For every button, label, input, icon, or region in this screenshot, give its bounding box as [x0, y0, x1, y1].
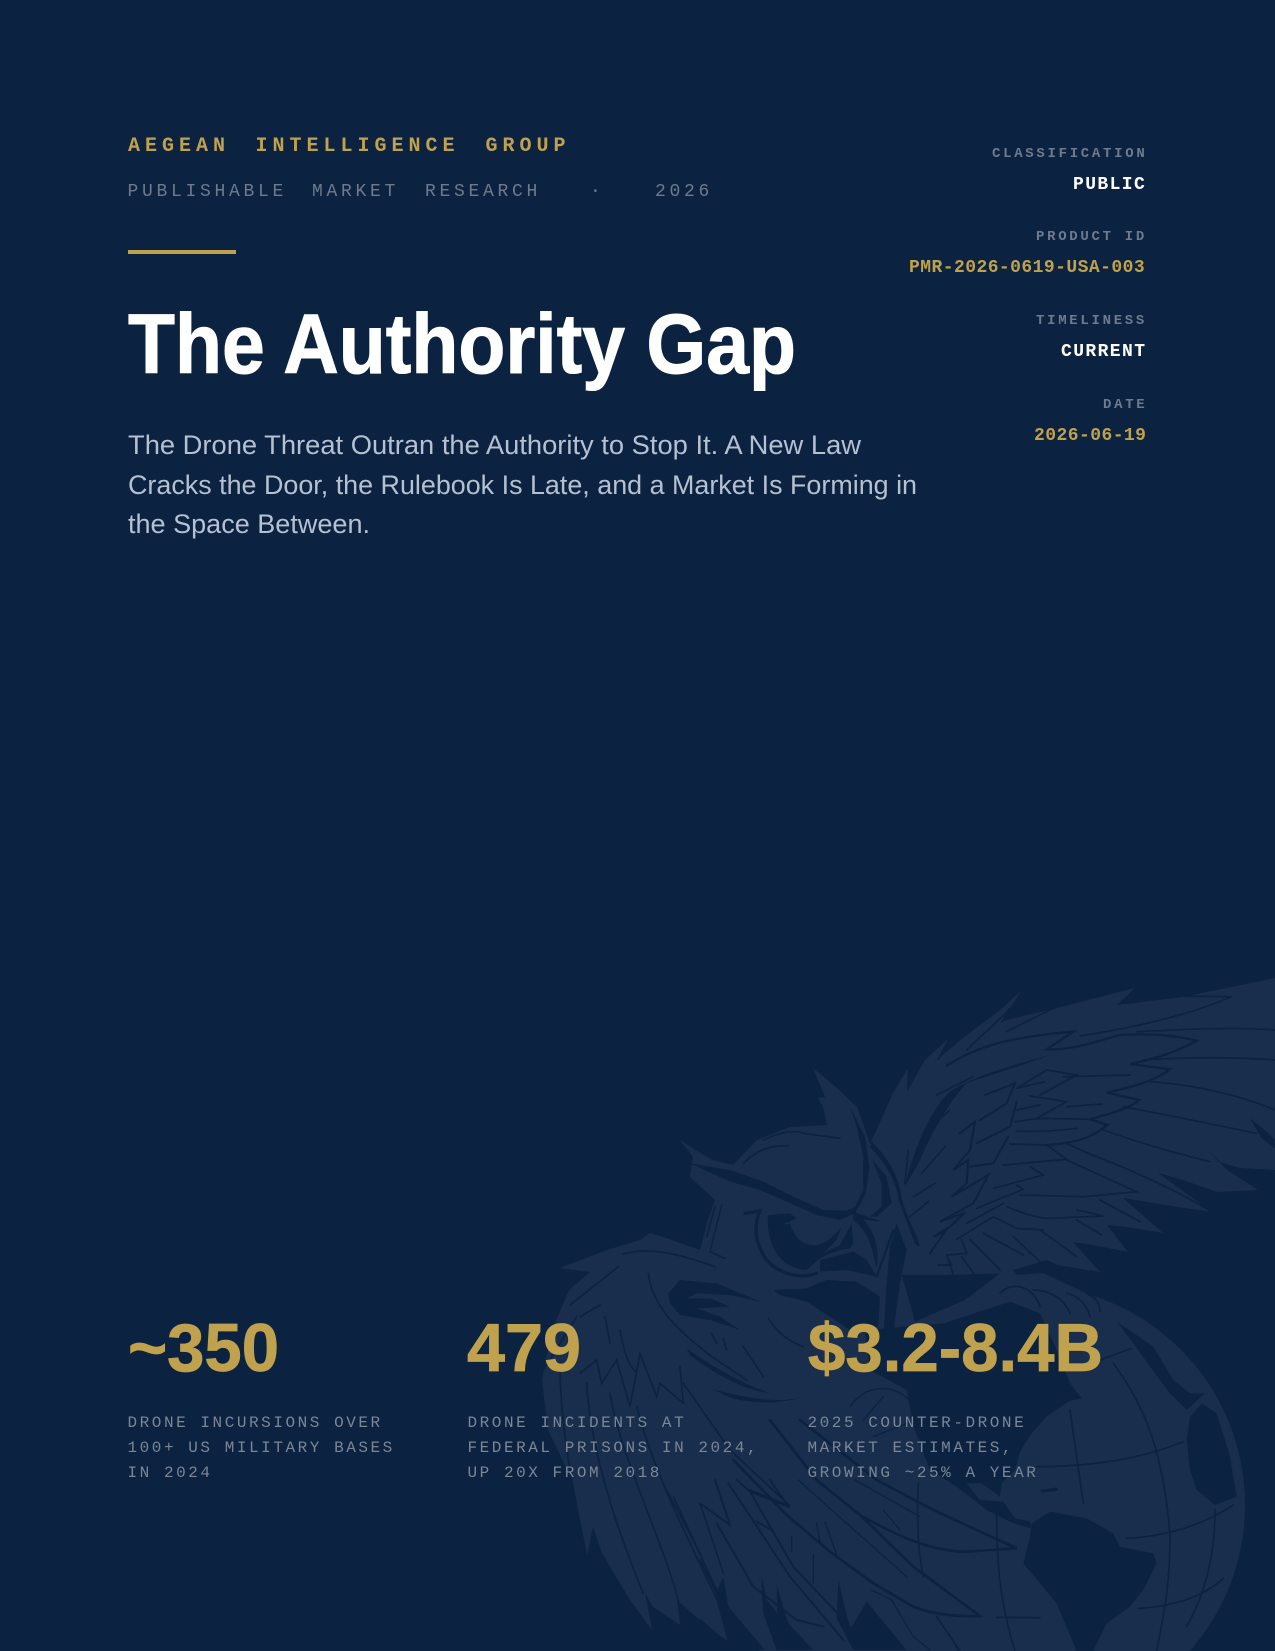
timeliness: CURRENT: [1061, 342, 1146, 362]
subtitle: the Space Between.: [128, 509, 370, 539]
stat: drone incursions: 100+ US MILITARY BASES: [128, 1439, 395, 1457]
stat: prison incidents: [467, 1310, 759, 1482]
subtitle: Cracks the Door, the Rulebook Is Late, and a Market Is Forming in: [128, 470, 917, 500]
header: brand eyebrow: AEGEAN: [128, 135, 230, 158]
header: product line: RESEARCH: [425, 182, 541, 202]
date: [1034, 397, 1147, 446]
globe land masses and grid lines: [865, 1273, 1237, 1651]
stat: market size: MARKET ESTIMATES,: [808, 1439, 1014, 1457]
header: brand eyebrow: INTELLIGENCE: [256, 135, 460, 158]
timeliness: TIMELINESS: [1036, 313, 1147, 329]
header: product line: MARKET: [312, 182, 399, 202]
timeliness: [1036, 313, 1147, 362]
header: product line: PUBLISHABLE: [128, 182, 287, 202]
header: brand eyebrow: GROUP: [486, 135, 571, 158]
subtitle: The Drone Threat Outran the Authority to Stop It. A New Law: [128, 430, 861, 460]
classification: CLASSIFICATION: [992, 146, 1147, 162]
stat: market size: [808, 1310, 1103, 1482]
stat: drone incursions: [128, 1310, 395, 1482]
globe disc: [805, 1285, 1245, 1651]
owl head, brow and left shoulder details: [540, 1107, 917, 1380]
date: 2026-06-19: [1034, 426, 1146, 446]
classification: PUBLIC: [1073, 175, 1146, 195]
metadata column: [909, 146, 1147, 446]
header: product line: 2026: [655, 182, 713, 202]
gold rule: [128, 250, 236, 254]
owl talons: [1000, 1286, 1100, 1317]
subtitle: [128, 430, 917, 539]
product id: [909, 229, 1147, 278]
product id: PRODUCT ID: [1036, 229, 1147, 245]
stat: drone incursions: IN 2024: [128, 1464, 213, 1482]
stat: prison incidents: UP 20X FROM 2018: [468, 1464, 662, 1482]
stat: market size: $3.2-8.4B: [808, 1310, 1103, 1386]
stat: drone incursions: DRONE INCURSIONS OVER: [128, 1414, 383, 1432]
stat: market size: 2025 COUNTER-DRONE: [808, 1414, 1026, 1432]
header: product line: ·: [590, 182, 605, 202]
owl eye and beak: [745, 1211, 893, 1330]
owl silhouette: [542, 978, 1275, 1651]
owl lower left wing feathers: [560, 1348, 913, 1627]
stat: prison incidents: DRONE INCIDENTS AT: [468, 1414, 686, 1432]
stat: prison incidents: 479: [467, 1310, 581, 1386]
title: The Authority Gap: [128, 297, 796, 391]
classification: [992, 146, 1147, 195]
date: DATE: [1103, 397, 1147, 413]
long feather crescents and bottom notches: [700, 1420, 1017, 1650]
owl right wing details: [872, 996, 1275, 1290]
product id: PMR-2026-0619-USA-003: [909, 258, 1145, 278]
watermark: owl perched on globe: [540, 978, 1275, 1651]
stat: prison incidents: FEDERAL PRISONS IN 2024,: [468, 1439, 759, 1457]
stat: drone incursions: ~350: [128, 1310, 279, 1386]
stat: market size: GROWING ~25% A YEAR: [808, 1464, 1038, 1482]
